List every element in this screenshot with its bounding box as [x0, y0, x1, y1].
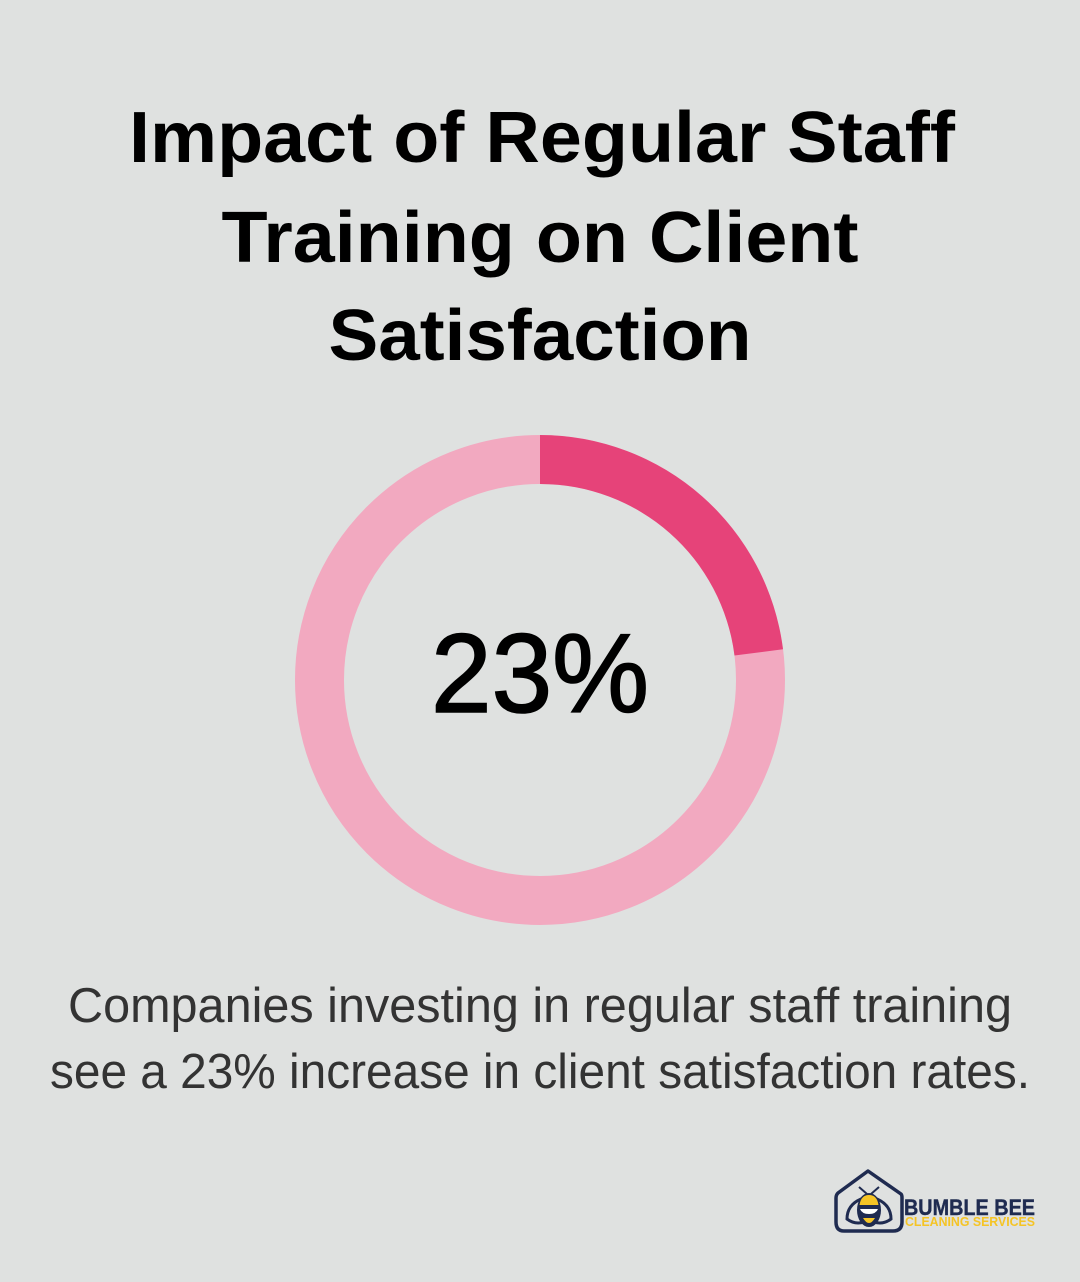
- logo: Bumble Bee Cleaning Services: [836, 1171, 1035, 1231]
- title: Impact of Regular Staff: [129, 98, 956, 178]
- ring highlighted segment: [540, 435, 783, 656]
- logo tagline: CLEANING SERVICES: [905, 1214, 1035, 1229]
- title: [129, 98, 956, 376]
- title: Satisfaction: [328, 296, 752, 376]
- ring remainder: [320, 460, 760, 900]
- donut chart: 23%: [320, 435, 783, 900]
- description text: Companies investing in regular staff training: [68, 979, 1012, 1033]
- description text: [50, 979, 1030, 1099]
- title: Training on Client: [222, 198, 859, 278]
- logo name: BUMBLE BEE: [904, 1195, 1035, 1220]
- icon: bee: [847, 1187, 891, 1227]
- donut value: 23%: [431, 611, 649, 736]
- description text: see a 23% increase in client satisfaction rates.: [50, 1045, 1030, 1099]
- icon: house outline: [836, 1171, 902, 1231]
